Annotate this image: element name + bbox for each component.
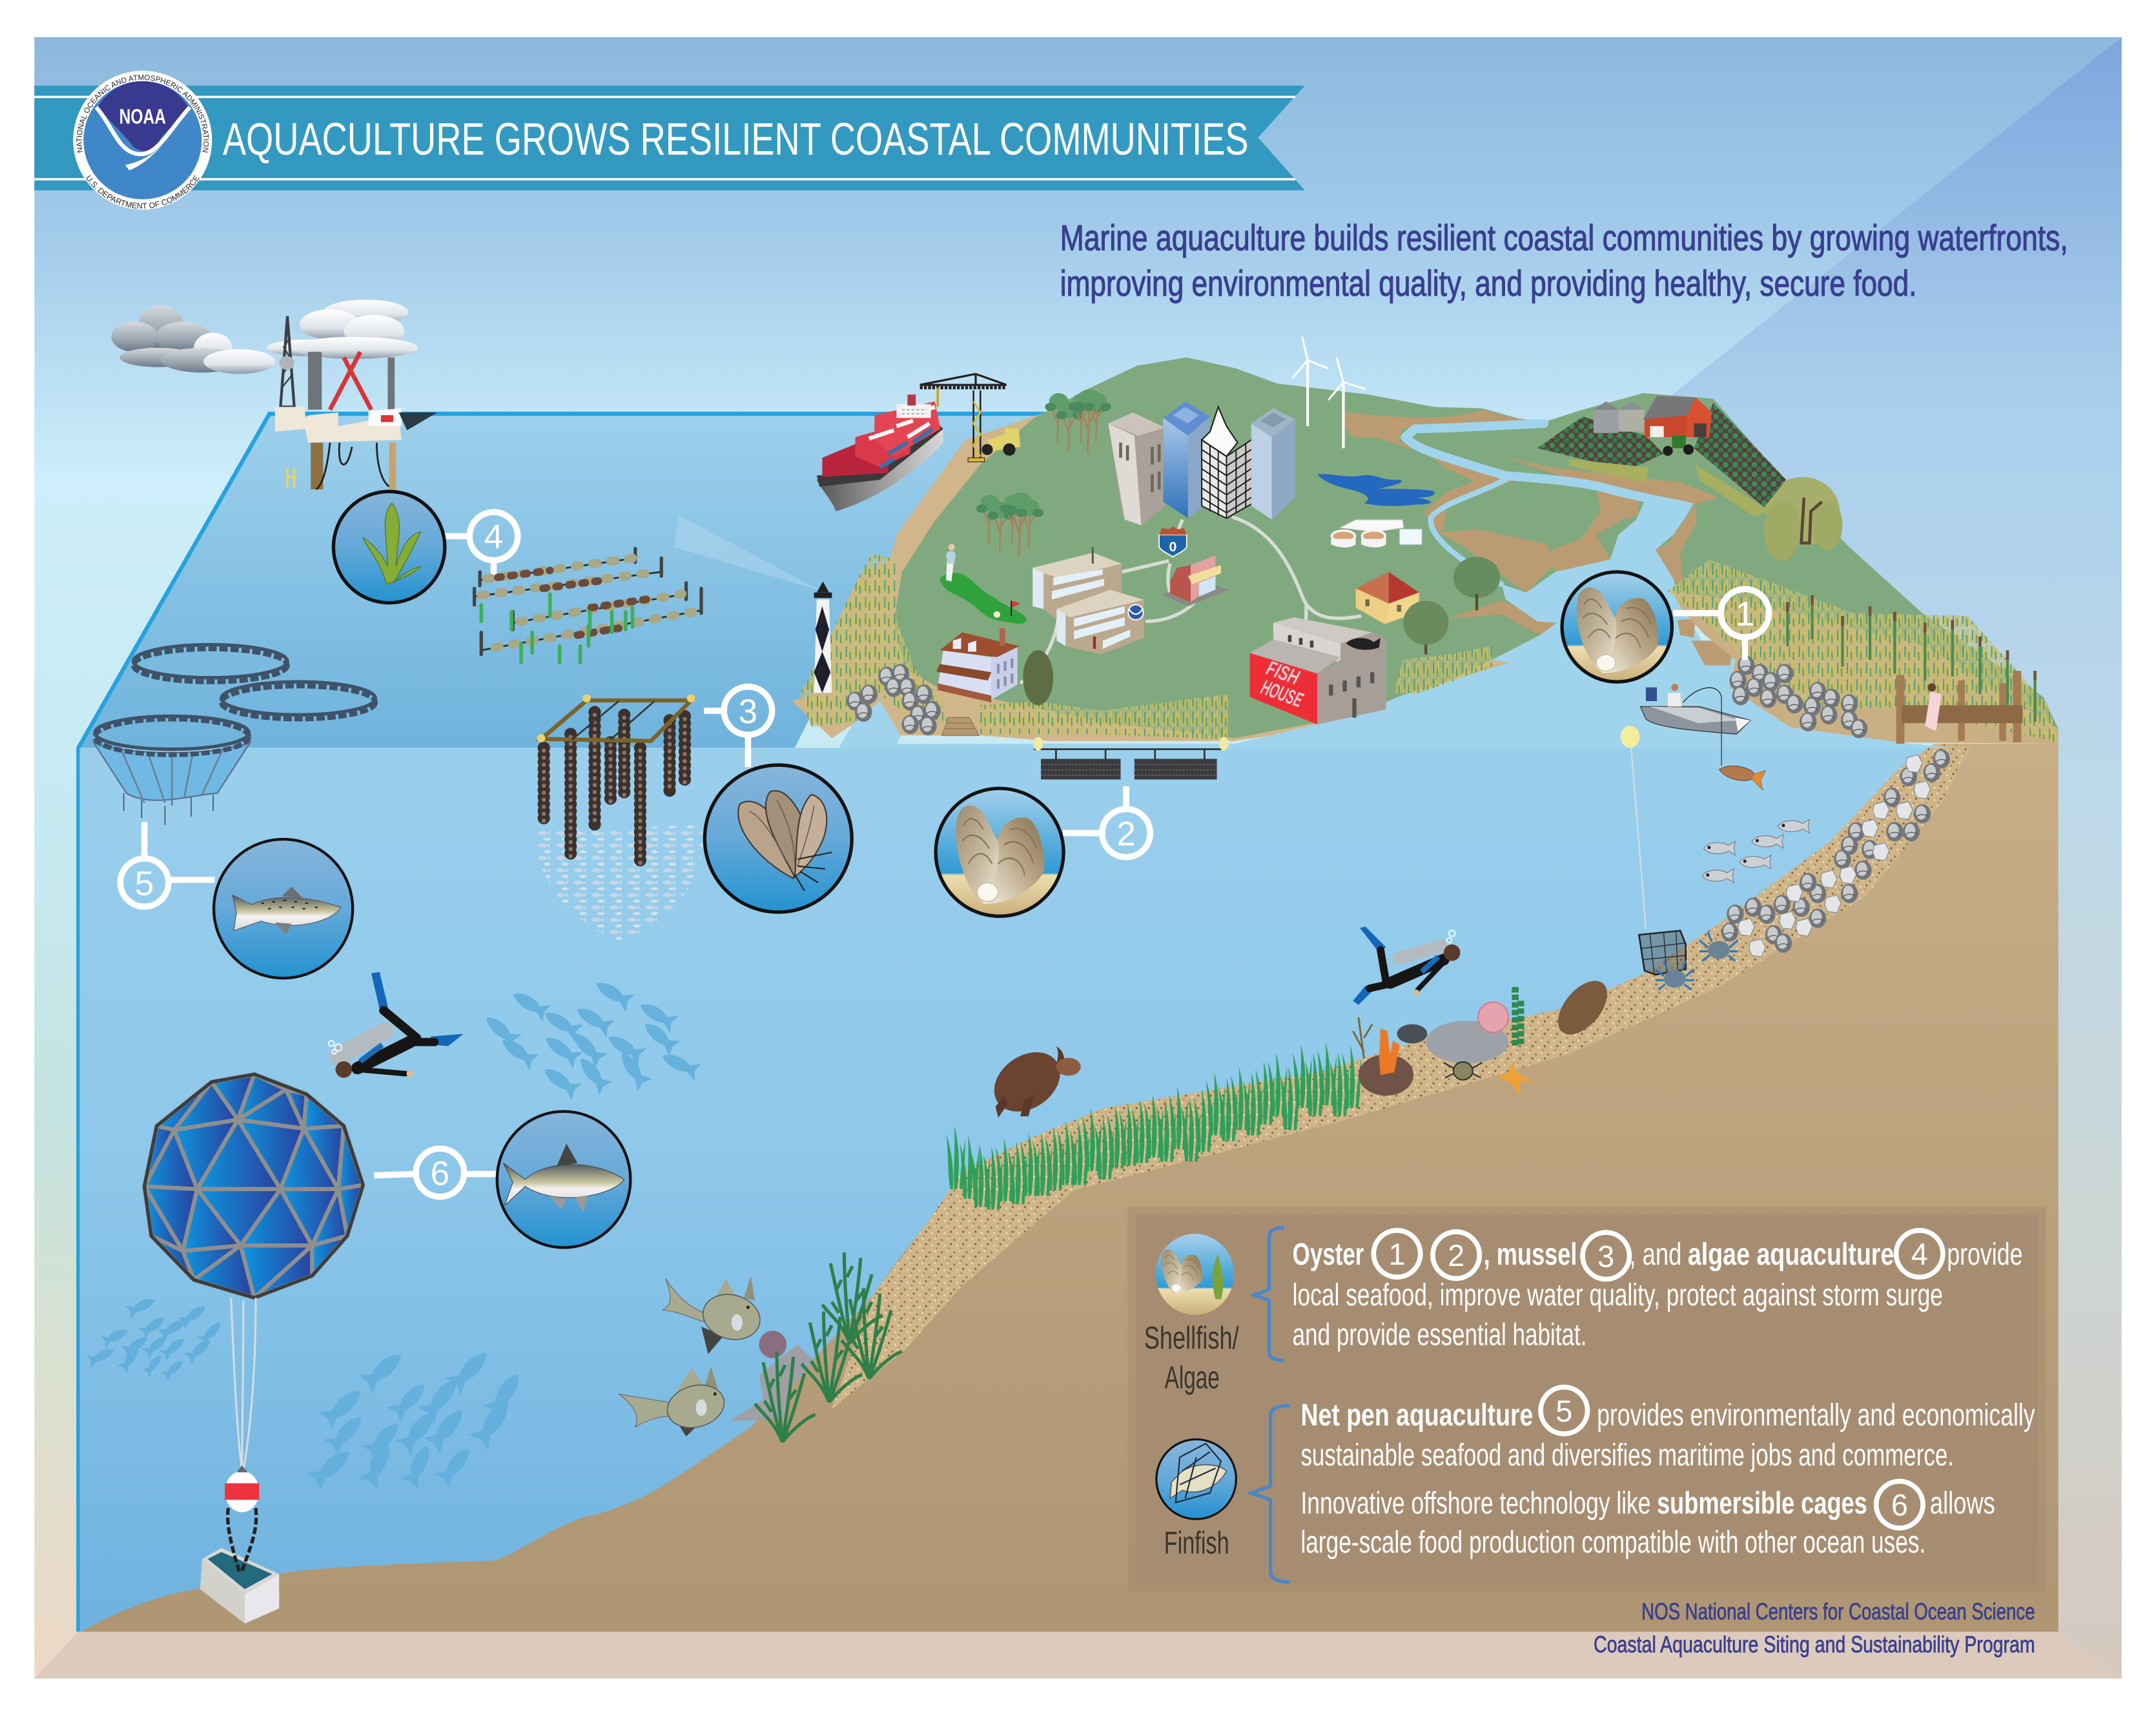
pale blue tower (1251, 408, 1295, 520)
circle number 3 (1583, 1232, 1629, 1279)
golf green and golfer (939, 544, 1027, 624)
upper office (1032, 547, 1122, 622)
orange starfish (1496, 1061, 1534, 1096)
yellow loader (981, 427, 1020, 456)
grey boulder (1426, 1021, 1508, 1063)
oil rig (275, 316, 437, 489)
red barn (1643, 396, 1712, 437)
front water body (80, 748, 2005, 1632)
cargo ship (817, 394, 943, 511)
branching dead coral (1353, 1017, 1372, 1059)
brain coral (1478, 1002, 1508, 1032)
shellfish text block: , and (1629, 1238, 1681, 1272)
grain silos (1594, 402, 1645, 433)
circle number 1 (1373, 1230, 1421, 1277)
number 6 callout (374, 1112, 630, 1247)
rocks and sea urchin (729, 1331, 814, 1422)
finfish text block (1300, 1387, 2035, 1560)
sea turtle (983, 1040, 1081, 1124)
finfish text block: large-scale food production compatible with other ocean uses. (1300, 1525, 1925, 1560)
shellfish algae label: Shellfish/ (1144, 1321, 1239, 1356)
credit line (1594, 1598, 2035, 1658)
number 3 callout (704, 687, 852, 912)
circle number 4: 4 (1911, 1238, 1928, 1271)
medallion 3 mussel (704, 765, 852, 912)
number 1 (1721, 589, 1769, 637)
shellfish text block: and provide essential habitat. (1293, 1318, 1586, 1352)
shellfish text block: local seafood, improve water quality, protect against storm surge (1293, 1278, 1943, 1312)
triggerfish upper (662, 1276, 765, 1354)
shellfish algae label: Algae (1165, 1361, 1220, 1396)
medallion 2 oyster (936, 788, 1063, 916)
reed marsh right (1668, 560, 2058, 742)
subheading (1060, 218, 2068, 303)
brown rock (1359, 1054, 1413, 1096)
medallion 6 amberjack (497, 1112, 630, 1247)
shellfish text block: algae aquaculture (1688, 1238, 1894, 1272)
green tractor (1663, 436, 1694, 456)
credit line: Coastal Aquaculture Siting and Sustainability Program (1594, 1631, 2035, 1658)
gray clouds (111, 305, 275, 374)
skyline buildings (1108, 402, 1295, 525)
circle number 3: 3 (1597, 1240, 1614, 1273)
water treatment plant (1331, 520, 1422, 547)
concrete anchor block (200, 1548, 279, 1624)
green kelp (1515, 987, 1521, 1048)
fish school lower left (85, 1293, 225, 1381)
triggerfish lower (619, 1367, 729, 1436)
NOAA logo: NOAA (119, 105, 166, 128)
blue tower (1164, 402, 1210, 518)
circle number 4 (1896, 1230, 1943, 1277)
flounder (1548, 972, 1617, 1043)
blue crabs (1656, 932, 1738, 990)
island (792, 337, 2058, 748)
road network (1020, 517, 1361, 683)
shellfish text block: provide (1947, 1238, 2022, 1272)
finfish text block: Innovative offshore technology like (1300, 1487, 1650, 1521)
fish school lower centre (305, 1345, 528, 1491)
shellfish algae label (1144, 1321, 1239, 1396)
red drum fish (1717, 761, 1767, 790)
number 5 callout (120, 822, 353, 978)
NOAA logo: NATIONAL OCEANIC AND ATMOSPHERIC ADMINISTRATION (76, 75, 209, 152)
glass tower (1202, 407, 1255, 518)
number 2: 2 (1116, 815, 1136, 853)
blue pond (1317, 474, 1435, 506)
shellfish bracket (1254, 1228, 1284, 1360)
grey tower (1108, 413, 1169, 525)
seaweed long lines (475, 549, 701, 662)
mussel longline raft (533, 694, 704, 941)
diver right (1353, 926, 1460, 1005)
shade trees (1023, 477, 1842, 705)
credit line: NOS National Centers for Coastal Ocean Science (1641, 1598, 2035, 1624)
river mud flats (1343, 410, 1719, 635)
medallion 5 salmon (214, 839, 353, 978)
historic house (936, 628, 1020, 702)
silver fish (1702, 819, 1809, 883)
shellfish algae icon (1156, 1234, 1234, 1315)
fishing boat (1640, 684, 1750, 734)
oyster reef left shore (847, 664, 941, 735)
harbor crane (920, 374, 1007, 462)
small fish school (533, 825, 704, 941)
circle number 2 (1433, 1232, 1479, 1278)
fish school upper (480, 975, 703, 1100)
title banner ribbon (34, 86, 1305, 190)
fishing line (1721, 697, 1722, 766)
seabed ground (81, 744, 2058, 1632)
finfish bracket (1251, 1405, 1289, 1582)
white clouds (267, 300, 418, 359)
fish house building (1250, 617, 1386, 724)
NOAA logo (73, 71, 212, 210)
lighthouse beam (673, 516, 822, 591)
finfish label: Finfish (1164, 1525, 1229, 1560)
river channels (1405, 423, 1686, 584)
number 6: 6 (431, 1155, 449, 1193)
number 1: 1 (1735, 595, 1754, 633)
near pen with net (94, 716, 251, 825)
net pens (94, 645, 375, 825)
number 5 (120, 859, 169, 906)
orange coral (1379, 1028, 1400, 1075)
inlet on left shore (839, 701, 901, 748)
right shore sand (1672, 591, 2058, 744)
subheading: improving environmental quality, and providing healthy, secure food. (1060, 263, 1916, 303)
interstate sign (1159, 527, 1187, 556)
sandy speckled slope band (832, 744, 1972, 1409)
yellow house (1356, 572, 1419, 624)
NOAA badge on office (1128, 605, 1144, 620)
circle number 1: 1 (1389, 1238, 1406, 1271)
finfish icon (1156, 1440, 1236, 1519)
raft frame (541, 700, 691, 741)
number 4 callout (333, 491, 518, 603)
water surface edge line (78, 414, 1045, 1632)
pine trees lower (976, 493, 1043, 556)
geodesic submersible cage (145, 1074, 363, 1298)
lower office (1056, 590, 1144, 655)
number 5: 5 (135, 864, 154, 903)
fish house building: FISH (1264, 656, 1303, 689)
circle number 6 (1876, 1481, 1923, 1528)
fish house building: HOUSE (1258, 675, 1306, 712)
number 1 callout (1562, 572, 1769, 682)
crab trap and buoy (1621, 726, 1686, 975)
reed marsh near fish house (1394, 646, 1492, 694)
number 3 (724, 687, 772, 735)
oyster reef on slope (1721, 750, 1950, 957)
mooring lines (231, 1298, 256, 1471)
circle number 2: 2 (1448, 1239, 1464, 1272)
far pen (134, 645, 287, 682)
number 2 (1102, 809, 1150, 857)
wooden dock (1896, 671, 2022, 744)
islets near marker one (1678, 618, 1732, 666)
eelgrass clumps (755, 1252, 902, 1442)
anchor chain (228, 1508, 256, 1571)
coastal pine trees (1045, 389, 1111, 454)
number 4 (469, 512, 518, 560)
cattail heads (1787, 595, 2035, 680)
finfish text block: submersible cages (1657, 1487, 1867, 1521)
shellfish text block: , mussel (1484, 1238, 1577, 1272)
finfish text block: Net pen aquaculture (1300, 1398, 1533, 1433)
dark reef fish (1397, 1024, 1427, 1043)
seagrass meadow (946, 1042, 1361, 1210)
diver left (329, 972, 464, 1077)
circle number 6: 6 (1891, 1489, 1908, 1522)
oyster cages (1033, 737, 1229, 779)
main green land (894, 358, 2058, 739)
farm fields (1537, 396, 1786, 517)
rope highlights (544, 715, 684, 863)
bay water (839, 498, 1953, 748)
reef community (1353, 972, 1617, 1096)
finfish text block: allows (1930, 1487, 1995, 1521)
number 3: 3 (739, 693, 757, 731)
shellfish text block: Oyster (1293, 1238, 1364, 1272)
title: AQUACULTURE GROWS RESILIENT COASTAL COMMUNITIES (223, 114, 1249, 165)
circle number 5 (1541, 1387, 1587, 1434)
circle number 5: 5 (1555, 1394, 1572, 1428)
middle pen (221, 682, 375, 719)
back water surface (78, 414, 1045, 748)
medallion 1 oyster (1562, 572, 1672, 682)
wooden steps (942, 718, 979, 735)
number 4: 4 (484, 518, 503, 556)
reed marsh bottom (979, 694, 1228, 740)
hanging ropes (544, 712, 684, 863)
interstate sign: 0 (1169, 539, 1176, 555)
oyster reef right shore (1729, 656, 1867, 739)
reed marsh left (800, 554, 949, 727)
storefront (1162, 555, 1229, 606)
cattails (1787, 605, 2035, 722)
wind turbines (1293, 337, 1366, 448)
number 6 (416, 1148, 464, 1197)
island sand left (792, 413, 1558, 741)
legend panel (1127, 1207, 2046, 1592)
shellfish text block (1293, 1230, 2022, 1352)
NOAA logo: U.S. DEPARTMENT OF COMMERCE (87, 175, 200, 209)
crab (1444, 1062, 1483, 1080)
medallion 4 algae (333, 491, 445, 603)
office buildings (1032, 547, 1144, 655)
number 2 callout (936, 786, 1150, 916)
mooring buoy (225, 1465, 259, 1512)
lighthouse (814, 582, 832, 693)
